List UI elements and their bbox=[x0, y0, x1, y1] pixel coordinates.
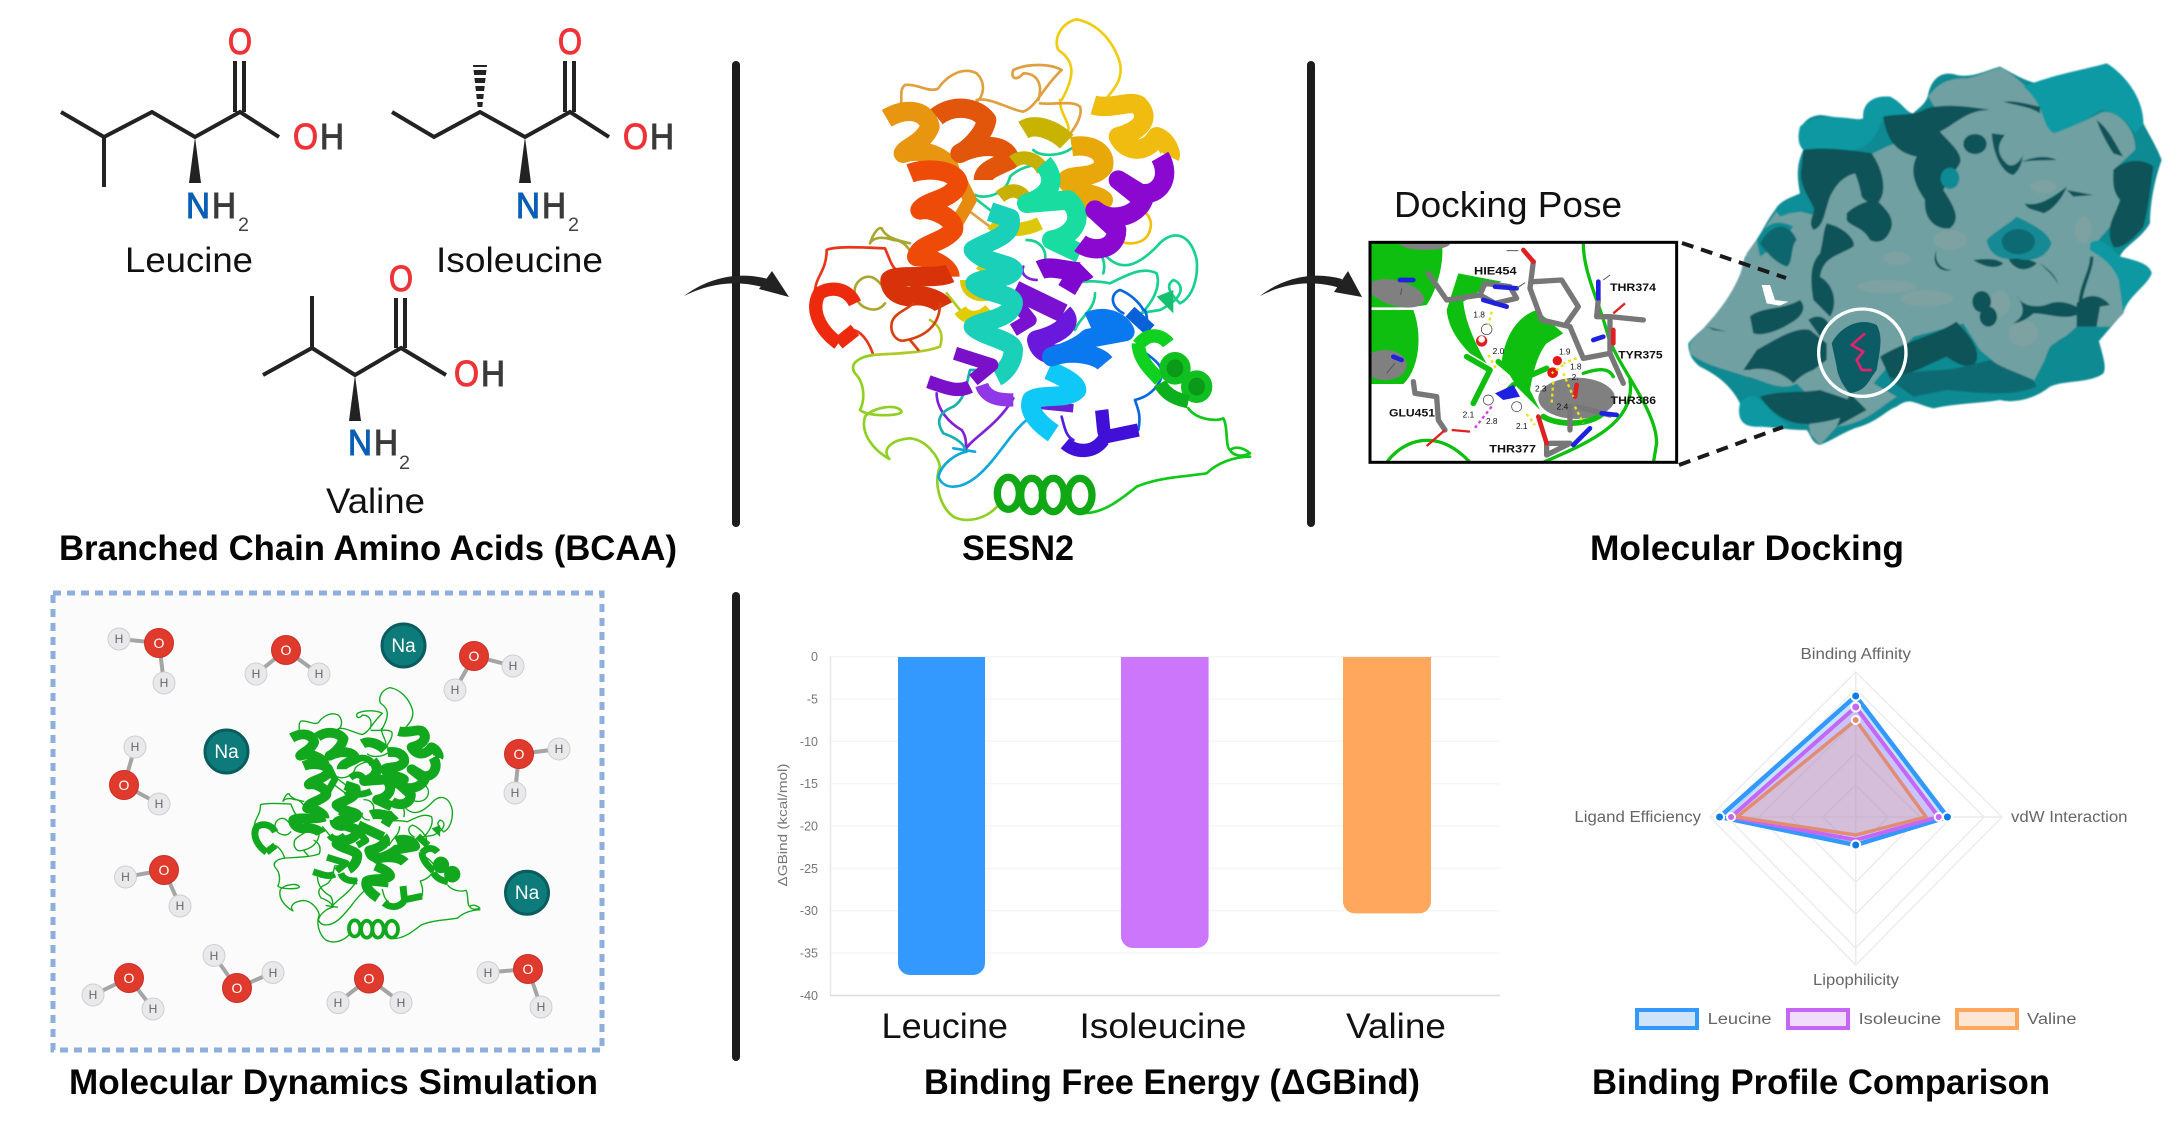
heading: BCAA: Branched Chain Amino Acids (BCAA) bbox=[59, 529, 677, 568]
water molecule: O bbox=[154, 635, 165, 651]
bar: valine bbox=[1343, 657, 1431, 913]
water molecule bbox=[245, 636, 330, 685]
water molecule bbox=[108, 628, 175, 694]
y axis ticks: -30 bbox=[800, 904, 818, 918]
y axis ticks: -10 bbox=[800, 735, 818, 749]
heading: binding profile: Binding Profile Comparison bbox=[1592, 1063, 2050, 1102]
water molecule: H bbox=[115, 632, 123, 646]
series: isoleucine bbox=[1731, 707, 1939, 840]
water molecule: O bbox=[514, 746, 525, 762]
x labels: Valine bbox=[1346, 1007, 1446, 1046]
protein surface bbox=[1688, 63, 2162, 445]
water molecule bbox=[110, 736, 170, 815]
panel: binding profile radar chart bbox=[1574, 646, 2128, 1102]
molecule: valine: H bbox=[374, 422, 398, 463]
water molecule: H bbox=[131, 740, 139, 754]
water molecule bbox=[327, 964, 412, 1014]
water molecule: H bbox=[210, 949, 218, 963]
water molecule: H bbox=[269, 966, 277, 980]
panel: binding free energy bar chart bbox=[775, 650, 1500, 1102]
legend bbox=[1637, 1010, 2076, 1028]
y axis ticks: -25 bbox=[800, 862, 818, 876]
y axis ticks: -35 bbox=[800, 946, 818, 960]
water molecule: H bbox=[397, 996, 405, 1010]
heading: binding free energy: Binding Free Energy (ΔGBind) bbox=[924, 1063, 1420, 1102]
molecule: valine: H bbox=[481, 353, 505, 394]
radar grid bbox=[1710, 672, 2002, 965]
water molecule: H bbox=[315, 667, 323, 681]
panel: molecular dynamics simulation bbox=[53, 593, 602, 1102]
water molecule: H bbox=[252, 667, 260, 681]
molecule: valine: Valine bbox=[326, 482, 425, 521]
water molecule: H bbox=[155, 797, 163, 811]
x labels: Isoleucine bbox=[1080, 1007, 1246, 1046]
heading: molecular dynamics: Molecular Dynamics Simulation bbox=[69, 1063, 598, 1102]
heading: molecular docking: Molecular Docking bbox=[1590, 529, 1904, 568]
molecule: leucine: 2 bbox=[238, 215, 249, 236]
bar: leucine bbox=[898, 657, 985, 975]
y axis ticks: 0 bbox=[811, 650, 818, 664]
arrow: protein to docking bbox=[1260, 271, 1362, 297]
water molecule: H bbox=[451, 683, 459, 697]
x labels bbox=[882, 1007, 1446, 1046]
molecule: leucine: O bbox=[293, 116, 318, 157]
water molecule: H bbox=[160, 676, 168, 690]
simulation box bbox=[53, 593, 602, 1050]
water molecule bbox=[444, 642, 524, 701]
docking pose inset: 2. bbox=[1572, 372, 1579, 382]
molecule: valine bbox=[263, 258, 505, 521]
series: leucine bbox=[1720, 696, 1947, 845]
molecule: valine: N bbox=[348, 422, 372, 463]
water molecule bbox=[477, 954, 552, 1018]
water molecule: H bbox=[334, 996, 342, 1010]
water molecule bbox=[504, 738, 570, 804]
molecule: leucine bbox=[61, 21, 344, 280]
water molecule: H bbox=[484, 966, 492, 980]
binding pocket circle bbox=[1819, 309, 1906, 396]
molecule: valine: 2 bbox=[399, 453, 410, 474]
molecule: leucine: Leucine bbox=[125, 241, 253, 280]
arrow: amino acids to protein bbox=[684, 271, 789, 297]
water molecule: O bbox=[119, 777, 130, 793]
molecule: leucine: H bbox=[212, 185, 236, 226]
heading: docking pose: Docking Pose bbox=[1394, 184, 1622, 225]
water molecule bbox=[82, 964, 164, 1020]
x labels: Leucine bbox=[882, 1007, 1008, 1046]
water molecule bbox=[203, 944, 284, 1002]
docking pose inset: HIE454 bbox=[1474, 265, 1518, 277]
y axis ticks: -20 bbox=[800, 820, 818, 834]
sodium ion: Na bbox=[391, 636, 416, 657]
heading: SESN2: SESN2 bbox=[962, 529, 1074, 568]
molecule: leucine: O bbox=[228, 21, 252, 62]
legend: Valine bbox=[2027, 1011, 2076, 1028]
water molecule: O bbox=[124, 970, 135, 986]
molecule: valine: O bbox=[454, 353, 479, 394]
water molecule: H bbox=[555, 742, 563, 756]
molecule: leucine: H bbox=[320, 116, 344, 157]
water molecule: O bbox=[232, 980, 243, 996]
y axis title: ΔGBind (kcal/mol) bbox=[775, 763, 790, 887]
molecule: isoleucine: H bbox=[542, 185, 566, 226]
data points bbox=[1715, 692, 1952, 850]
water molecule: H bbox=[121, 870, 130, 884]
water molecule: H bbox=[537, 1000, 545, 1014]
series: valine bbox=[1737, 720, 1926, 835]
water molecule: O bbox=[469, 648, 480, 664]
docking pose inset: THR377 bbox=[1489, 444, 1536, 456]
docking pose inset: 2.1 bbox=[1463, 409, 1475, 419]
docking pose inset: 1.8 bbox=[1473, 310, 1485, 320]
y axis ticks: -40 bbox=[800, 989, 818, 1003]
docking pose inset: TYR375 bbox=[1618, 350, 1663, 362]
sodium ion: Na bbox=[214, 742, 239, 763]
molecule: isoleucine: H bbox=[650, 116, 674, 157]
docking pose inset: 2.0 bbox=[1493, 346, 1505, 356]
water molecule: H bbox=[176, 899, 184, 913]
sodium ion bbox=[205, 730, 248, 773]
docking pose inset bbox=[1363, 237, 1677, 463]
water molecule: O bbox=[159, 862, 170, 878]
molecule: isoleucine: O bbox=[558, 21, 582, 62]
axis labels: Binding Affinity bbox=[1800, 646, 1911, 663]
molecule: isoleucine bbox=[392, 21, 674, 280]
docking pose inset: 1.9 bbox=[1559, 346, 1571, 356]
panel: molecular docking bbox=[1363, 63, 2162, 568]
axis labels: vdW Interaction bbox=[2011, 809, 2128, 826]
docking pose inset: 2.3 bbox=[1535, 384, 1547, 394]
bar: isoleucine bbox=[1121, 657, 1209, 948]
sodium ion: Na bbox=[515, 883, 540, 904]
docking pose inset: 1.8 bbox=[1570, 361, 1582, 371]
water molecule: O bbox=[364, 970, 375, 986]
panel: SESN2 protein ribbon bbox=[815, 19, 1250, 568]
molecule: isoleucine: N bbox=[516, 185, 540, 226]
y axis ticks: -15 bbox=[800, 777, 818, 791]
dashed zoom lines bbox=[1679, 243, 1786, 465]
docking pose inset: THR386 bbox=[1611, 395, 1656, 407]
docking pose inset: 2.4 bbox=[1557, 401, 1569, 411]
molecule: leucine: N bbox=[186, 185, 210, 226]
molecule: isoleucine: Isoleucine bbox=[436, 241, 603, 280]
legend: Isoleucine bbox=[1859, 1011, 1941, 1028]
water molecule: H bbox=[511, 786, 519, 800]
docking pose inset: THR374 bbox=[1610, 282, 1657, 294]
axis labels: Ligand Efficiency bbox=[1574, 809, 1701, 826]
molecule: isoleucine: 2 bbox=[568, 215, 579, 236]
y axis ticks bbox=[800, 650, 818, 1003]
docking pose inset: 2.1 bbox=[1516, 421, 1528, 431]
water molecule: H bbox=[149, 1002, 157, 1016]
sodium ion bbox=[506, 871, 548, 914]
docking pose inset: GLU451 bbox=[1389, 408, 1435, 420]
y axis ticks: -5 bbox=[807, 692, 818, 706]
axis labels bbox=[1574, 646, 2128, 989]
molecule: isoleucine: O bbox=[623, 116, 648, 157]
water molecule: H bbox=[509, 659, 517, 673]
water molecule: O bbox=[523, 961, 534, 977]
axis labels: Lipophilicity bbox=[1813, 972, 1899, 989]
grid and axes bbox=[830, 656, 1500, 996]
water molecule bbox=[114, 856, 191, 917]
water molecule: H bbox=[89, 988, 97, 1002]
sodium ion bbox=[382, 624, 425, 667]
docking pose inset: 2.8 bbox=[1486, 416, 1498, 426]
water molecule: O bbox=[281, 642, 292, 658]
panel: branched chain amino acids bbox=[59, 21, 677, 568]
molecule: valine: O bbox=[389, 258, 413, 299]
ribbon structure bbox=[815, 19, 1250, 520]
green protein bbox=[254, 688, 480, 942]
legend: Leucine bbox=[1708, 1011, 1772, 1028]
